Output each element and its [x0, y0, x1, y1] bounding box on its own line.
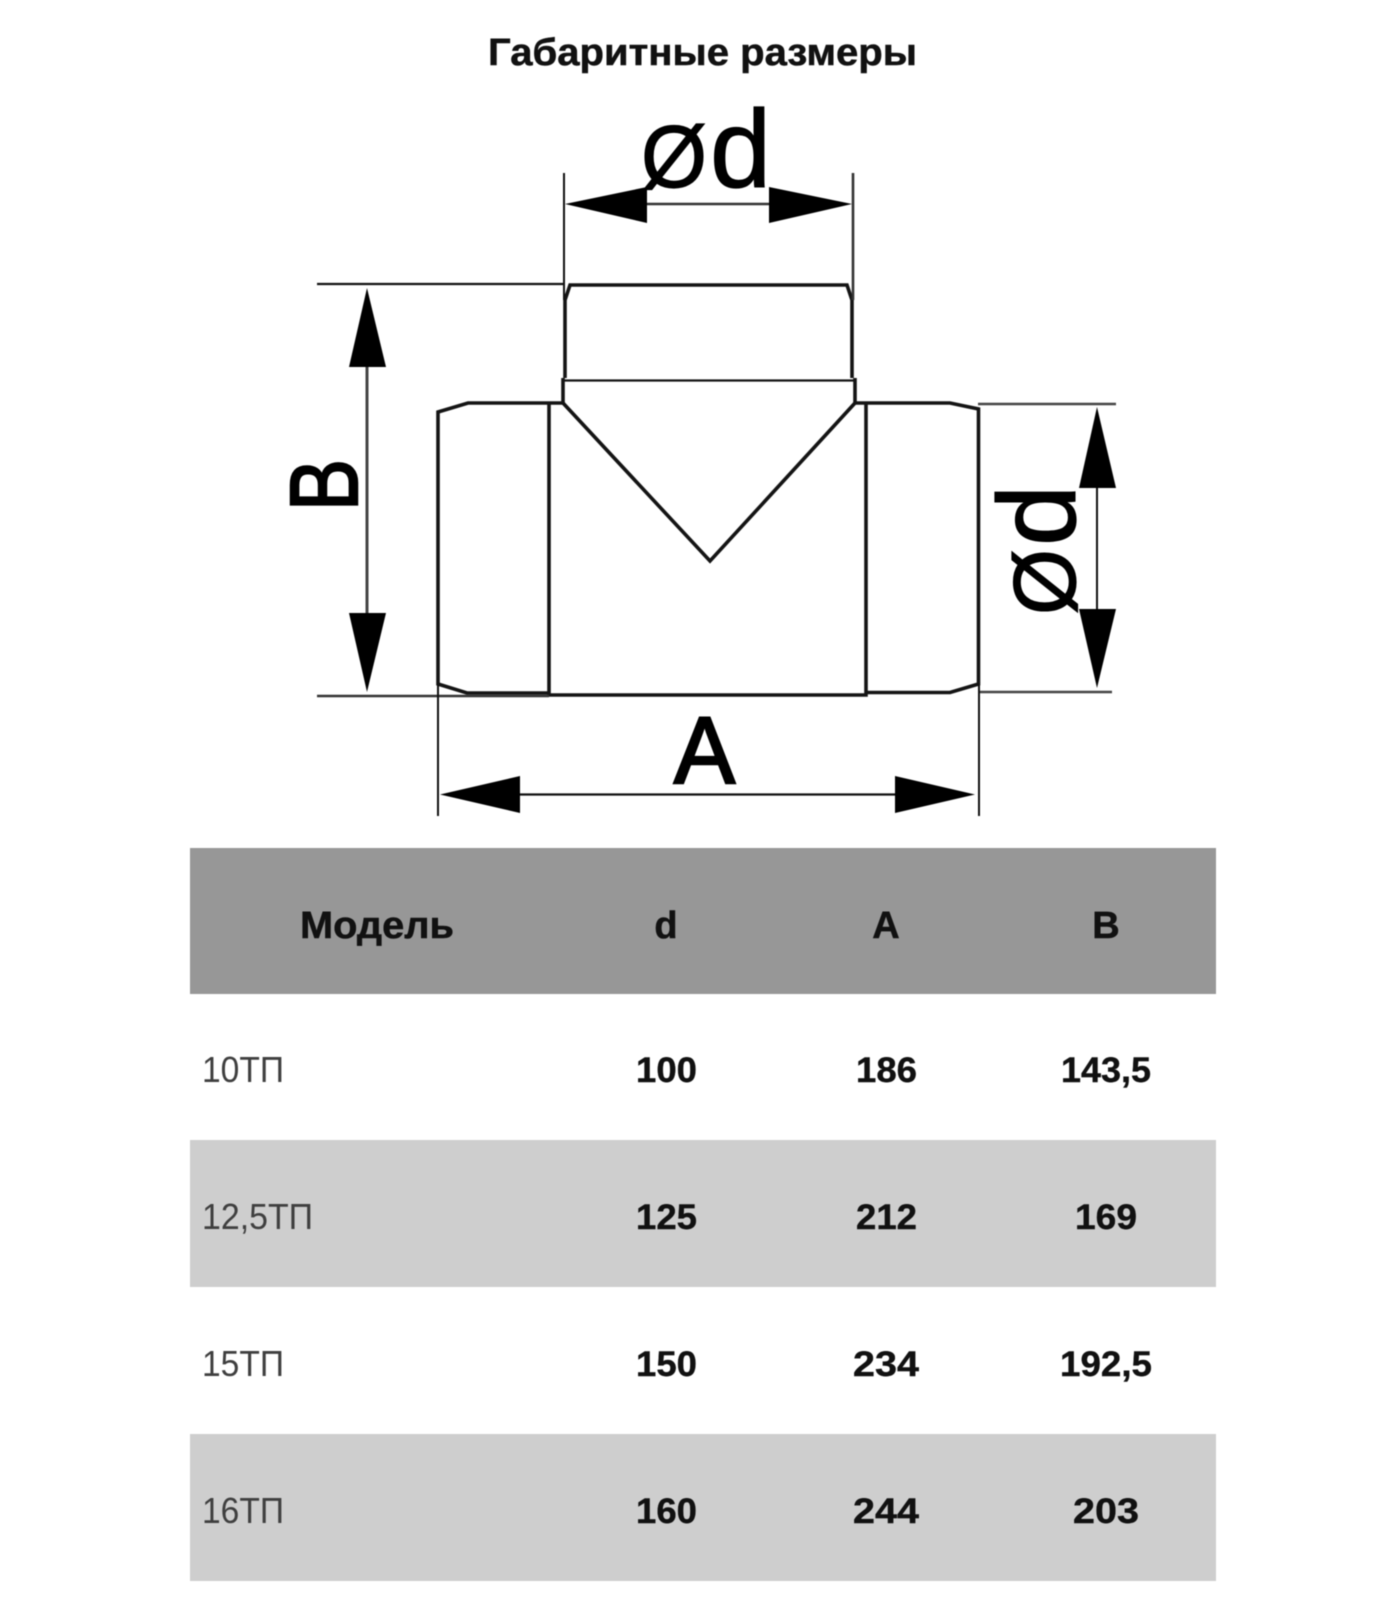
row: 16ТП: 244: [853, 1492, 920, 1531]
dimension: top diameter: Ø: [641, 107, 707, 206]
title: Габаритные размеры: [488, 32, 917, 74]
row: 10ТП: 10ТП: [202, 1049, 284, 1090]
row: 10ТП: [190, 994, 1216, 1140]
row: 16ТП: 203: [1073, 1492, 1139, 1531]
dimension: A: [438, 684, 979, 816]
row: 16ТП: 16ТП: [202, 1490, 284, 1531]
row: 16ТП: [190, 1434, 1216, 1581]
table header row: B: [1092, 905, 1120, 947]
dimension: right diameter: [976, 404, 1116, 692]
dimension: A: A: [674, 698, 736, 804]
row: 15ТП: 15ТП: [202, 1343, 284, 1384]
row: 16ТП: 160: [636, 1492, 697, 1531]
row: 12,5ТП: 12,5ТП: [202, 1196, 313, 1237]
row: 10ТП: 143,5: [1061, 1051, 1151, 1090]
row: 15ТП: 150: [636, 1345, 697, 1384]
table header row: [190, 848, 1216, 994]
tee body outline: [438, 285, 978, 695]
dimension: B: B: [271, 459, 378, 511]
row: 10ТП: 100: [636, 1051, 697, 1090]
row: 12,5ТП: 125: [636, 1198, 697, 1237]
row: 15ТП: 234: [853, 1345, 920, 1384]
row: 10ТП: 186: [856, 1051, 917, 1090]
table header row: Модель: [300, 905, 454, 947]
dimension: top diameter: d: [710, 88, 771, 211]
row: 12,5ТП: 212: [856, 1198, 917, 1237]
table: dimensions by model: [190, 848, 1216, 1581]
row: 12,5ТП: [190, 1140, 1216, 1287]
dimension: top diameter: [564, 88, 853, 300]
technical drawing: tee fitting: [271, 88, 1116, 816]
row: 12,5ТП: 169: [1075, 1198, 1137, 1237]
dimension: B: [271, 284, 565, 696]
table header row: A: [872, 905, 900, 947]
row: 15ТП: 192,5: [1060, 1345, 1152, 1384]
row: 15ТП: [190, 1287, 1216, 1434]
dimension: right diameter: d: [976, 485, 1099, 546]
dimension: right diameter: Ø: [995, 549, 1094, 615]
table header row: d: [654, 905, 678, 947]
